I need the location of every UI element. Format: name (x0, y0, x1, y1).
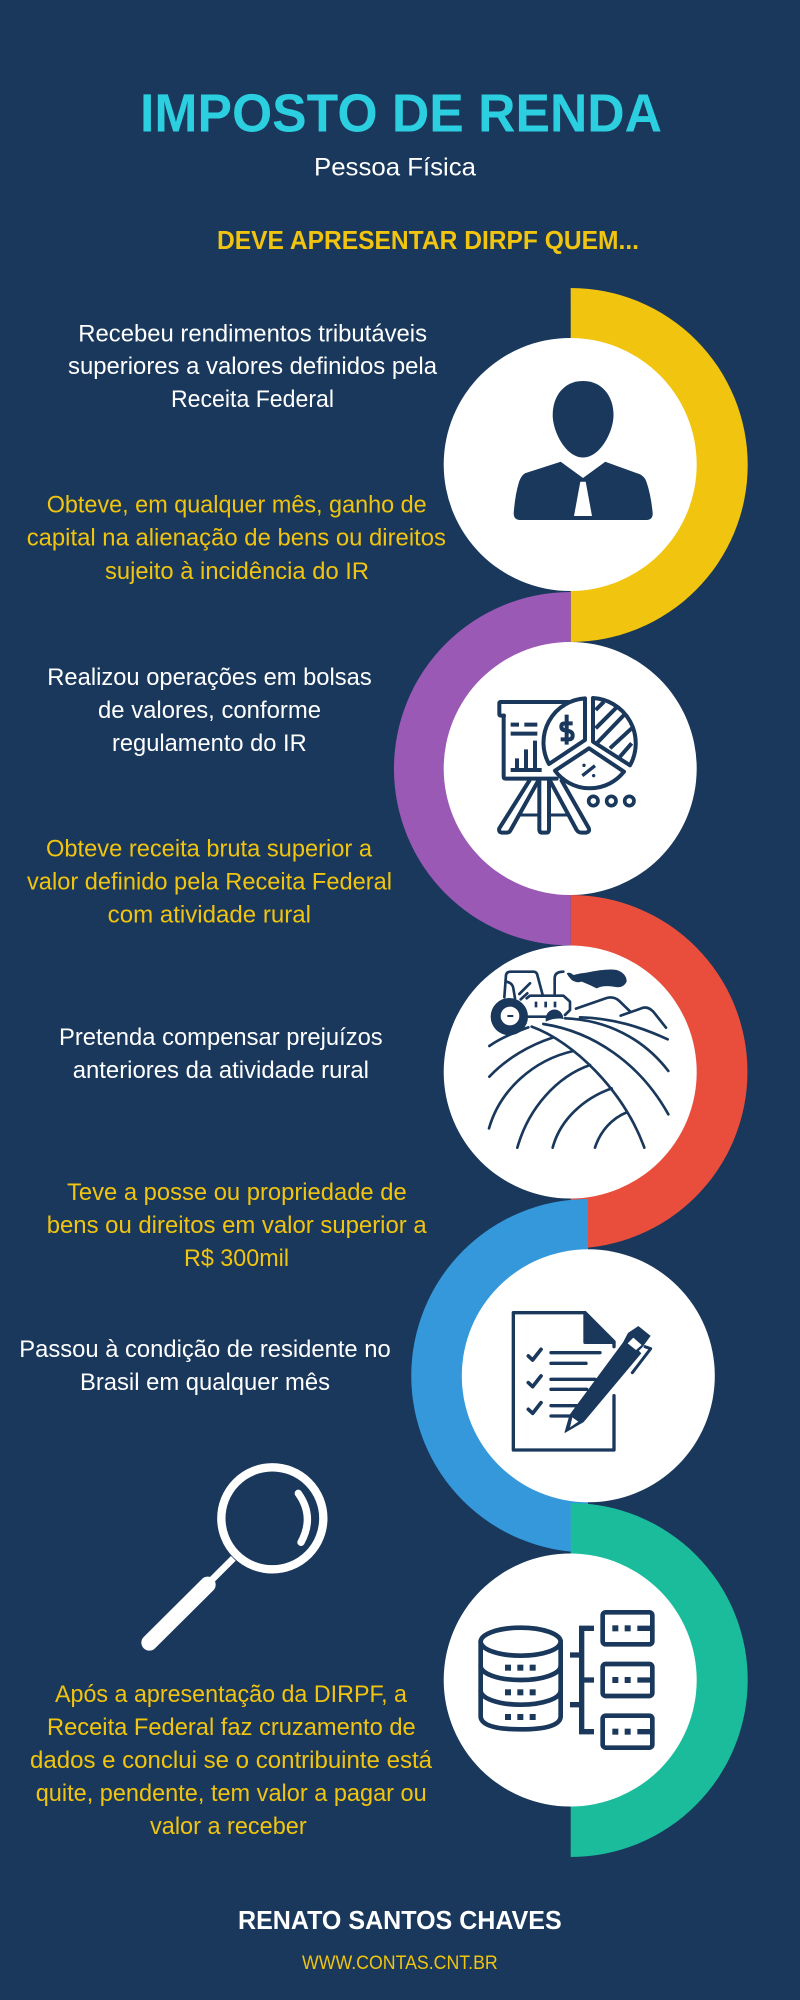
icon: magnifying glass (149, 1467, 323, 1643)
white circle: document (462, 1249, 715, 1502)
text block: bolsas de valores: Realizou operações em bolsas (47, 664, 372, 691)
icon: database and records (481, 1612, 652, 1748)
title: IMPOSTO DE RENDA (140, 84, 662, 144)
text block: bolsas de valores (47, 664, 372, 757)
text block: cruzamento de dados: quite, pendente, tem valor a pagar ou (36, 1780, 427, 1807)
text block: posse de bens: R$ 300mil (184, 1245, 289, 1272)
text block: compensar prejuízos (59, 1024, 383, 1084)
half ring: yellow (571, 288, 748, 642)
website: WWW.CONTAS.CNT.BR (302, 1953, 498, 1974)
text block: receita bruta rural: Obteve receita bruta superior a (46, 836, 373, 863)
text block: rendimentos tributáveis: superiores a valores definidos pela (68, 353, 438, 380)
white circle: farm (444, 946, 697, 1198)
author name: RENATO SANTOS CHAVES (238, 1905, 562, 1935)
text block: receita bruta rural: com atividade rural (108, 902, 311, 929)
icon: presentation board and pie chart (499, 698, 636, 833)
text block: ganho de capital: Obteve, em qualquer mês, ganho de (47, 492, 427, 519)
text block: rendimentos tributáveis: Recebeu rendimentos tributáveis (78, 321, 427, 348)
text block: posse de bens: Teve a posse ou propriedade de (67, 1179, 407, 1206)
icon: tractor on field (489, 970, 668, 1148)
text block: bolsas de valores: de valores, conforme (98, 697, 321, 724)
text block: cruzamento de dados (30, 1681, 433, 1840)
text block: compensar prejuízos: Pretenda compensar prejuízos (59, 1024, 383, 1051)
text block: ganho de capital: capital na alienação de bens ou direitos (27, 525, 446, 552)
white circle: database (444, 1554, 697, 1806)
half ring: green (571, 1503, 748, 1857)
text block: cruzamento de dados: Após a apresentação da DIRPF, a (55, 1681, 408, 1708)
text block: ganho de capital (27, 492, 446, 585)
half ring: red (571, 895, 747, 1248)
icon: checklist and pen (513, 1313, 651, 1450)
text block: ganho de capital: sujeito à incidência do IR (105, 558, 369, 585)
white circle: chart (444, 642, 697, 895)
text block: cruzamento de dados: valor a receber (150, 1813, 307, 1840)
subtitle: Pessoa Física (314, 154, 476, 182)
text block: posse de bens (47, 1179, 427, 1272)
text block: rendimentos tributáveis (68, 321, 438, 413)
icon: businessman (514, 381, 653, 520)
text block: receita bruta rural: valor definido pela Receita Federal (27, 869, 392, 896)
text block: posse de bens: bens ou direitos em valor superior a (47, 1212, 427, 1239)
text block: receita bruta rural (27, 836, 392, 929)
text block: cruzamento de dados: Receita Federal faz cruzamento de (47, 1714, 416, 1741)
text block: rendimentos tributáveis: Receita Federal (171, 386, 334, 413)
text block: compensar prejuízos: anteriores da atividade rural (73, 1057, 369, 1084)
half ring: purple (394, 592, 571, 946)
text block: condição de residente (19, 1336, 391, 1396)
text block: condição de residente: Passou à condição de residente no (19, 1336, 391, 1363)
text block: bolsas de valores: regulamento do IR (112, 730, 307, 757)
section heading: DEVE APRESENTAR DIRPF QUEM... (217, 225, 639, 255)
text block: condição de residente: Brasil em qualquer mês (80, 1369, 330, 1396)
white circle: person (444, 338, 697, 591)
text block: cruzamento de dados: dados e conclui se o contribuinte está (30, 1747, 433, 1774)
half ring: blue (411, 1199, 588, 1552)
